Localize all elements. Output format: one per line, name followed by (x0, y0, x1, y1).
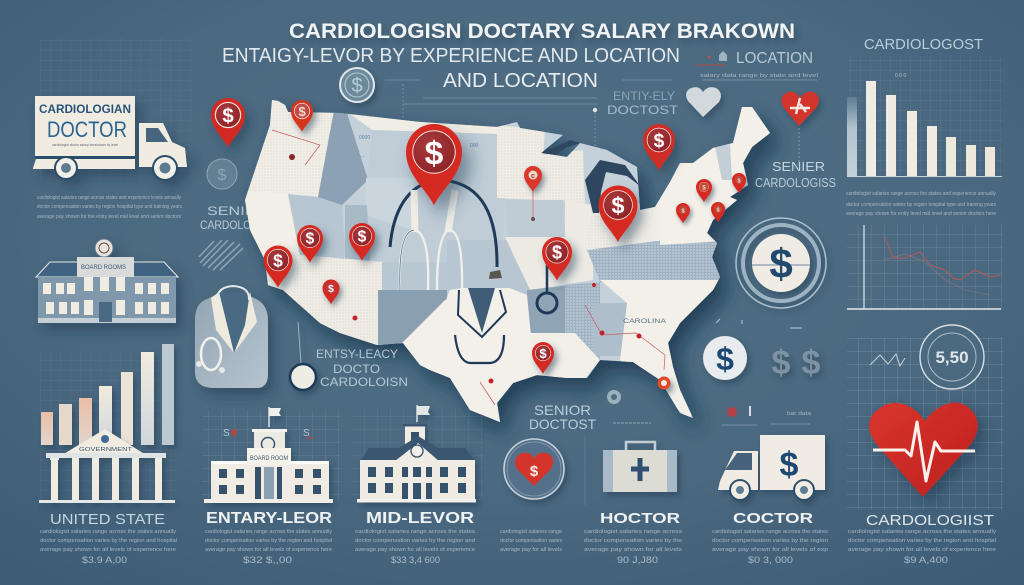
label: senior cardiologist right: SENIER (772, 159, 825, 174)
icons: grey dollars: $ (772, 344, 791, 382)
text block: united state detail: doctor compensation varies by the region and hospital (40, 538, 177, 544)
small state marks: 0000 (359, 135, 370, 141)
icon: 5,50 ring: 5,50 (935, 348, 969, 367)
text block: hoctor detail: doctor compensation varies by the (584, 538, 682, 544)
label: entry level doctor cardiologist: DOCTO (333, 362, 380, 376)
small icon: coin near florida (607, 390, 651, 423)
pin: pennsylvania: $ (681, 208, 685, 214)
icon: hospital building: BOARD ROOMS (81, 264, 127, 271)
panel: mid level (352, 405, 484, 565)
heading: right chart label: CARDIOLOGOST (864, 36, 983, 53)
icon: navy dollar coin: $ (716, 341, 734, 377)
pin: utah: $ (358, 229, 367, 246)
small state marks: .... (360, 153, 366, 159)
heading: senior doctost: SENIOR (534, 402, 591, 418)
pin: arizona (322, 280, 340, 304)
label: senior cardiologist left: SENIIE (207, 204, 260, 218)
text block: top right description (846, 191, 996, 217)
text block: united state detail: average pay shown for all levels of experience here (40, 547, 176, 553)
text block: mid level detail: doctor compensation varies by the region and (355, 538, 475, 544)
pin: boston: $ (737, 178, 741, 184)
text block: cardiologist detail: cardiologist salaries range across the states annually (848, 529, 996, 535)
pin: california: $ (273, 250, 283, 270)
panel: senior doctor (500, 402, 596, 553)
panel: entry level: S (303, 428, 310, 439)
text block: hoctor detail: cardiologist salaries range across (584, 529, 682, 535)
icon: faint coin left (207, 159, 237, 189)
small icons: row above truck: bar data (787, 411, 812, 417)
panel: united state (39, 344, 178, 565)
icon: red heart (781, 92, 819, 126)
small state marks: 000 (470, 143, 479, 149)
pin: new york (696, 179, 712, 202)
icon: heart in ring (504, 439, 564, 499)
text block: coctor detail: cardiologist salaries range across the states (712, 529, 828, 535)
label: senior cardiologist left: CARDOLOGISS (200, 218, 276, 232)
icon: bank building: GOVERNMENT (79, 447, 133, 453)
lakes (543, 140, 640, 213)
pin: great lakes upper (643, 124, 675, 170)
icon: small trend (870, 354, 905, 366)
pin: new york: $ (702, 185, 706, 192)
heading: senior doctost: DOCTOST (529, 416, 596, 432)
text block: senior detail: doctor compensation varies (500, 538, 562, 544)
bar chart: top right: 0 0 0 (895, 73, 906, 79)
icon: pendant stethoscope (290, 322, 316, 390)
line chart: top right (847, 225, 1002, 309)
icon: cardiologian doctor truck: CARDIOLOGIAN (39, 102, 131, 116)
pin: far west: $ (222, 105, 234, 127)
pin: louisiana (532, 342, 554, 374)
label: entry-level doctor top (593, 89, 679, 117)
salary: united state: $3.9 A,00 (82, 555, 127, 565)
icon: dollar truck: $ (780, 446, 799, 484)
heading: hoctor: HOCTOR (600, 510, 680, 527)
salary: entry level: $32 $,,00 (243, 555, 292, 565)
text block: top right description: cardiologist salaries range across the states and experience annually (846, 191, 996, 197)
stethoscope on map (390, 180, 502, 290)
label: entry level doctor cardiologist: ENTSY-LEACY (316, 347, 398, 361)
text block: hoctor detail (584, 529, 682, 553)
text block: mid level detail: cardiologist salaries range across the states (355, 529, 475, 535)
pin: florida (658, 376, 670, 390)
title: AND LOCATION (443, 70, 598, 92)
heading: cardiologist: CARDOLOGIIST (866, 512, 994, 529)
pin: arizona: $ (328, 284, 334, 295)
text block: truck description: average pay shown for the entry level mid level and senior doctors (37, 214, 181, 220)
icon: doctor coat left (195, 286, 268, 388)
small icons: row above truck (716, 319, 812, 425)
icon: heart in ring: $ (530, 463, 539, 480)
icon: medical case (603, 442, 677, 492)
icon: mid hospital (357, 405, 476, 502)
panel: hoctor (584, 435, 682, 565)
small state marks (359, 135, 479, 159)
label: senior cardiologist right: CARDOLOGISS (755, 175, 836, 190)
heading: senior doctost (529, 402, 596, 432)
label: senior cardiologist left (200, 204, 276, 232)
text block: coctor detail (712, 529, 828, 553)
map: united states (240, 90, 780, 425)
secondary location label: LOCATION (736, 50, 813, 67)
pin: louisiana: $ (539, 346, 547, 361)
icon: hatch swirl (199, 240, 243, 270)
salary: coctor: $0 3, 000 (748, 555, 793, 565)
title: CARDIOLOGISN DOCTARY SALARY BRAKOWN (289, 20, 795, 43)
route lines and dots (272, 130, 665, 405)
icon: pale heart (686, 87, 721, 117)
icon: big heart ecg (869, 403, 978, 497)
text block: hoctor detail: average pay shown for all levels (584, 547, 682, 553)
heading: mid level: MID-LEVOR (366, 510, 475, 527)
pin: great lakes upper: $ (654, 131, 665, 152)
text block: entry level detail: cardiologist salaries range across the states annually (205, 529, 332, 535)
bar chart: rising salaries (41, 344, 174, 445)
stethoscope ring (537, 265, 557, 313)
salary: hoctor: 90 J,J80 (617, 555, 658, 565)
text block: coctor detail: average pay shown for all levels of exp (712, 547, 828, 553)
pin: illinois: $ (552, 243, 562, 263)
label: senior cardiologist right (755, 128, 836, 190)
text block: entry level detail: average pay shown for all levels of experience here (205, 547, 332, 553)
panel: entry level: S (223, 428, 230, 439)
label: georgia: CAROLINA (623, 319, 666, 325)
pin: new jersey (711, 202, 725, 222)
icons: grey dollars: $ (802, 344, 821, 382)
label: entry level doctor cardiologist: CARDOLOISN (320, 375, 408, 389)
icon: 5,50 ring (920, 325, 984, 389)
icon: dollar target (736, 218, 826, 308)
text block: coctor detail: doctor compensation varies by the region (712, 538, 828, 544)
text block: truck description: doctor compensation varies by region hospital type and training years (37, 204, 182, 210)
panel: top-left truck (33, 38, 193, 181)
text block: truck description: cardiologist salaries range across states and experience levels annually (37, 195, 181, 201)
panel: entry level (202, 407, 340, 565)
icon: navy dollar coin (703, 336, 747, 380)
title (222, 20, 795, 92)
panel: coctor (712, 435, 828, 565)
pin: washington: $ (298, 104, 306, 119)
label: entry level doctor cardiologist (316, 347, 408, 389)
icon: cardiologian doctor truck (33, 96, 187, 181)
text block: senior detail: average pay for all levels (500, 547, 562, 553)
pin: nevada (297, 225, 323, 263)
pin: washington (291, 100, 313, 132)
pin: boston (732, 173, 746, 193)
axis lines under title (385, 80, 672, 150)
pin: michigan: $ (611, 193, 625, 219)
icon: cardiologian doctor truck: DOCTOR (47, 117, 127, 142)
text block: mid level detail: average pay shown for all levels of experience (355, 547, 475, 553)
text block: entry level detail (205, 529, 332, 553)
text block: senior detail (500, 529, 562, 553)
icon: dollar target: $ (769, 240, 793, 287)
pin: large center (406, 124, 462, 205)
icon: bank building (39, 429, 175, 503)
text block: cardiologist detail: average pay shown for all levels of experience here (848, 547, 996, 553)
icon: top coin (340, 68, 374, 102)
pin: far west (211, 98, 245, 147)
heading: entry level: ENTARY-LEOR (206, 510, 332, 527)
secondary location label (697, 50, 818, 80)
secondary location label: salary data range by state and level (700, 73, 818, 79)
heading: united state: UNITED STATE (50, 511, 165, 528)
text block: mid level detail (355, 529, 475, 553)
text block: top right description: average pay shown for entry level mid level and senior doctors here (846, 211, 996, 217)
icon: faint coin left: $ (218, 167, 227, 184)
icons: grey dollars (772, 344, 821, 382)
text block: cardiologist detail (848, 529, 996, 553)
text block: top right description: doctor compensation varies by region hospital type and training years (846, 202, 996, 208)
text block: united state detail: cardiologist salaries range across the states annually (40, 529, 176, 535)
state regions (240, 90, 780, 425)
panel: cardiologist (847, 325, 1003, 565)
bar chart: top right (847, 56, 1003, 178)
pin: utah (349, 223, 375, 261)
pin: illinois (542, 237, 572, 280)
text block: united state detail (40, 529, 177, 553)
salary: mid level: $33 3,4 600 (391, 555, 440, 565)
salary: cardiologist: $9 A,400 (904, 555, 948, 565)
icon: top coin: $ (351, 75, 363, 97)
pin: pennsylvania (676, 203, 690, 223)
pin: california (264, 246, 292, 288)
pin: michigan (598, 186, 638, 242)
icon: hospital building (36, 239, 178, 323)
pin: midwest small: c (531, 171, 535, 180)
label: entry-level doctor top: ENTIY-ELY (613, 89, 675, 103)
text block: truck description (37, 195, 182, 220)
pin: large center: $ (425, 135, 444, 172)
icon: entry hospital: BOARD ROOM (250, 456, 288, 462)
pin: nevada: $ (306, 231, 315, 248)
title: ENTAIGY-LEVOR BY EXPERIENCE AND LOCATION (222, 45, 680, 67)
text block: entry level detail: doctor compensation varies by the region and hospital (205, 538, 332, 544)
text block: senior detail: cardiologist salaries range (500, 529, 562, 535)
heading: coctor: COCTOR (733, 510, 813, 527)
icon: entry hospital (204, 407, 333, 503)
label: entry-level doctor top: DOCTOST (607, 103, 679, 117)
icon: cardiologian doctor truck: cardiologist doctor salary breakdown by level (52, 143, 118, 147)
pin: midwest small (524, 166, 542, 192)
icon: white coat center (444, 288, 532, 370)
text block: cardiologist detail: doctor compensation varies by the region and hospital (848, 538, 996, 544)
pin: new jersey: $ (716, 207, 720, 213)
